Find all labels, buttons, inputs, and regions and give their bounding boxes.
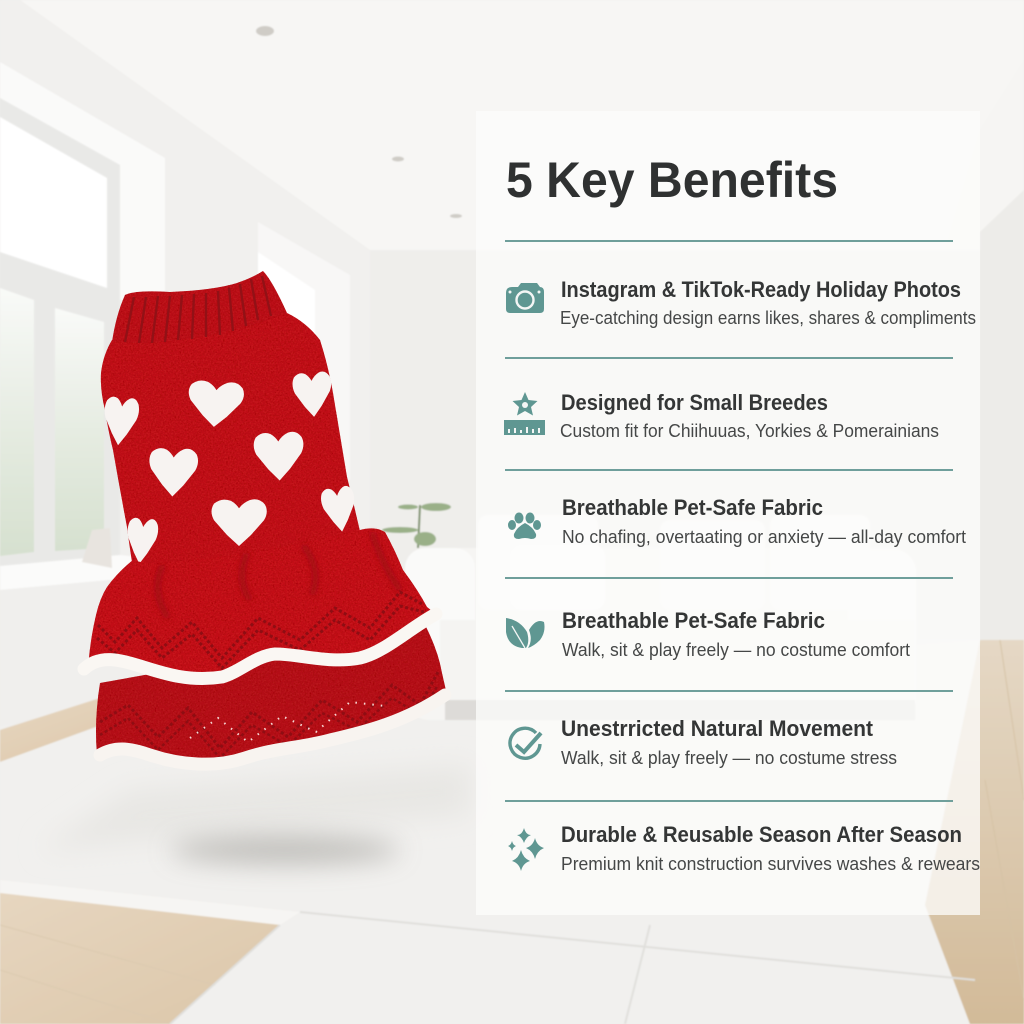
plant [382,503,451,548]
ruffle gathers [158,532,400,618]
back wall [370,250,1024,640]
lower white trim [100,695,445,764]
dress body [101,313,362,575]
icon: check circle [510,728,541,758]
second window [258,222,350,480]
ceiling [20,0,1024,250]
icon: star and ruler [504,392,545,435]
upper white trim [84,614,436,679]
benefit 6: Premium knit construction survives washes & rewears [561,854,980,874]
benefit 1: Eye-catching design earns likes, shares & compliments [560,308,976,328]
icon: paw [508,512,541,539]
benefit 3: No chafing, overtaating or anxiety — all-day comfort [562,527,966,547]
wood floor bottom left [0,893,280,1024]
title: 5 Key Benefits [506,152,838,208]
benefit 1 [506,277,976,328]
benefit 5: Unestrricted Natural Movement [561,716,874,741]
right beam and column [945,60,1024,250]
upper ruffle [88,528,436,680]
dress illustration [84,271,447,766]
marble floor [0,640,1024,1024]
floor tile lines [170,912,975,1024]
benefit 4: Breathable Pet-Safe Fabric [562,608,825,633]
icon: camera [506,283,544,313]
benefit 6 [508,822,980,874]
recessed lights [256,26,462,218]
left window [0,62,165,726]
wood floor right [925,640,1024,1024]
benefit 4: Walk, sit & play freely — no costume comfort [562,640,910,660]
benefit 4 [506,608,910,660]
floor shadow below dress [170,836,400,864]
hearts [101,371,359,565]
lower tier lace [100,672,438,758]
left wall [0,0,370,730]
lower skirt tier [96,625,447,766]
benefit 2: Designed for Small Breedes [561,390,828,415]
sofa [405,515,916,720]
neck ribbing [112,271,287,343]
icon: sparkles [508,828,544,871]
benefit 2: Custom fit for Chiihuuas, Yorkies & Pomerainians [560,421,939,441]
benefit 1: Instagram & TikTok-Ready Holiday Photos [561,277,961,302]
benefit 6: Durable & Reusable Season After Season [561,822,962,847]
icon: leaves [506,618,544,648]
wood floor left strip [0,698,170,762]
benefit 3 [508,495,966,547]
benefit 2 [504,390,939,441]
upper tier lace [97,592,424,668]
benefit 5: Walk, sit & play freely — no costume stress [561,748,897,768]
benefit 3: Breathable Pet-Safe Fabric [562,495,823,520]
benefit 5 [510,716,897,768]
panel: benefits [476,111,980,915]
floor reflection band [40,765,470,850]
